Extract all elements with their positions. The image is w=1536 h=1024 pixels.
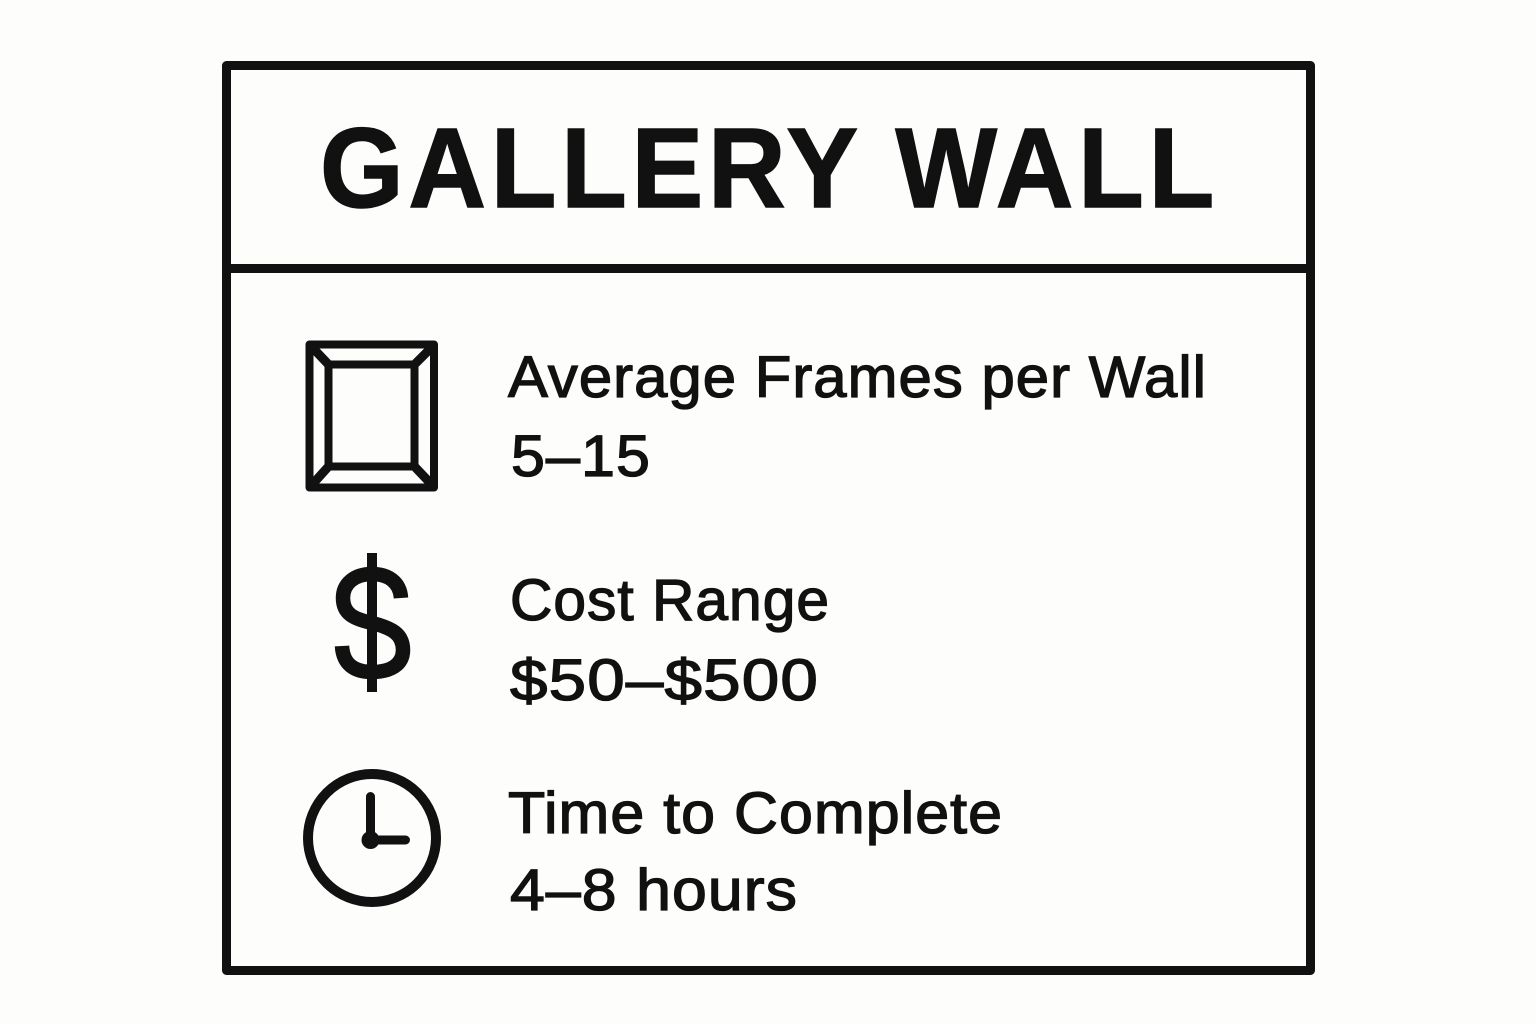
text block: average frames per wall: Average Frames per Wall <box>508 345 1207 410</box>
text block: average frames per wall: 5–15 <box>511 424 651 489</box>
text block: time to complete: Time to Complete <box>508 781 1003 846</box>
title: GALLERY WALL <box>320 105 1219 231</box>
icon: picture frame <box>310 344 434 488</box>
icon: dollar sign <box>342 553 403 692</box>
panel: outer frame <box>226 66 1310 970</box>
text block: cost range: $50–$500 <box>510 648 819 713</box>
text block: time to complete: 4–8 hours <box>510 858 798 923</box>
text block: average frames per wall <box>508 345 1207 489</box>
icon: clock <box>308 774 436 902</box>
text block: time to complete <box>508 781 1003 923</box>
text block: cost range: Cost Range <box>510 568 830 633</box>
text block: cost range <box>510 568 830 713</box>
